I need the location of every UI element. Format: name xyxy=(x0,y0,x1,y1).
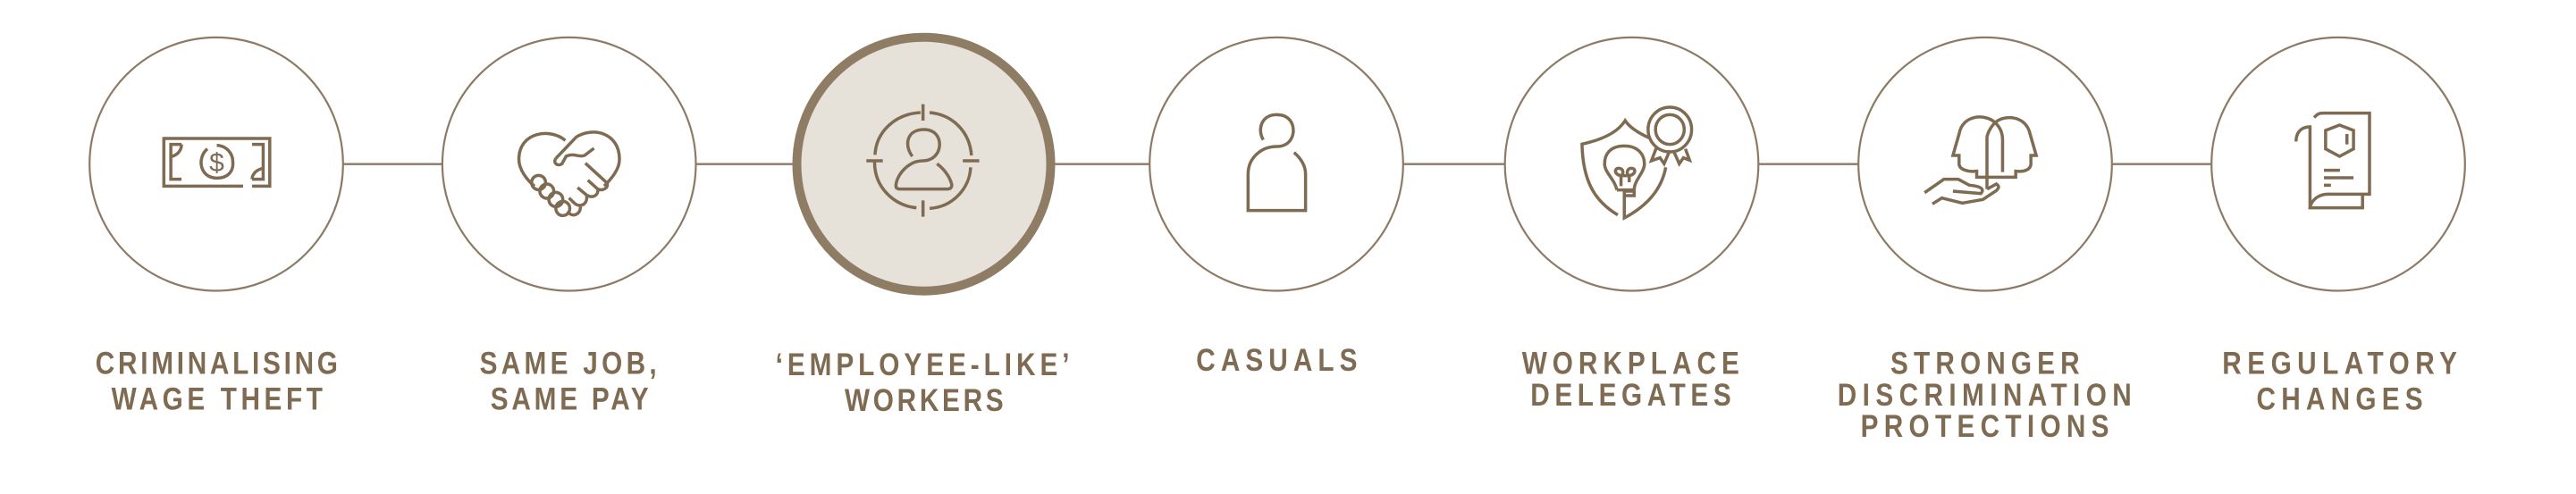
panel: same job, same pay xyxy=(442,38,695,416)
panel: regulatory changes xyxy=(2211,38,2465,416)
label: STRONGER xyxy=(1890,346,2080,381)
label: WORKPLACE xyxy=(1522,346,1739,381)
circle xyxy=(2211,38,2465,291)
label xyxy=(96,346,338,416)
label xyxy=(776,347,1070,418)
label xyxy=(2222,346,2457,416)
label: DELEGATES xyxy=(1530,378,1731,413)
icon: person xyxy=(1248,114,1306,211)
icon: banknote: $ xyxy=(209,148,224,178)
label xyxy=(1522,346,1739,413)
circle xyxy=(442,38,695,291)
panel: casuals xyxy=(1149,38,1403,378)
label: PROTECTIONS xyxy=(1861,409,2109,444)
label: SAME JOB, xyxy=(480,346,657,381)
label: CASUALS xyxy=(1196,343,1358,378)
icon: shield, bulb and rosette xyxy=(1582,107,1692,218)
label: ‘EMPLOYEE-LIKE’ xyxy=(776,347,1070,382)
icon: rule book with shield xyxy=(2296,113,2370,208)
icon: person in target xyxy=(866,105,980,217)
label xyxy=(480,346,657,416)
circle xyxy=(797,38,1051,291)
label: REGULATORY xyxy=(2222,346,2457,381)
label: SAME PAY xyxy=(491,381,649,416)
circle xyxy=(1505,38,1758,291)
circle xyxy=(1858,38,2112,291)
circle xyxy=(1149,38,1403,291)
connector lines xyxy=(343,163,2211,165)
label: WAGE THEFT xyxy=(112,381,323,416)
panel: stronger discrimination protections xyxy=(1838,38,2132,444)
panel: criminalising wage theft xyxy=(89,38,343,416)
panel: workplace delegates xyxy=(1505,38,1758,413)
label: CRIMINALISING xyxy=(96,346,338,381)
label: WORKERS xyxy=(845,383,1004,418)
label xyxy=(1838,346,2132,444)
icon: handshake heart xyxy=(519,132,619,215)
label: DISCRIMINATION xyxy=(1838,378,2132,413)
panel: employee-like workers (highlighted) xyxy=(776,38,1070,418)
label: CHANGES xyxy=(2256,381,2423,416)
icon: two heads on a hand xyxy=(1924,117,2036,204)
circle xyxy=(89,38,343,291)
icon: banknote xyxy=(164,138,270,186)
